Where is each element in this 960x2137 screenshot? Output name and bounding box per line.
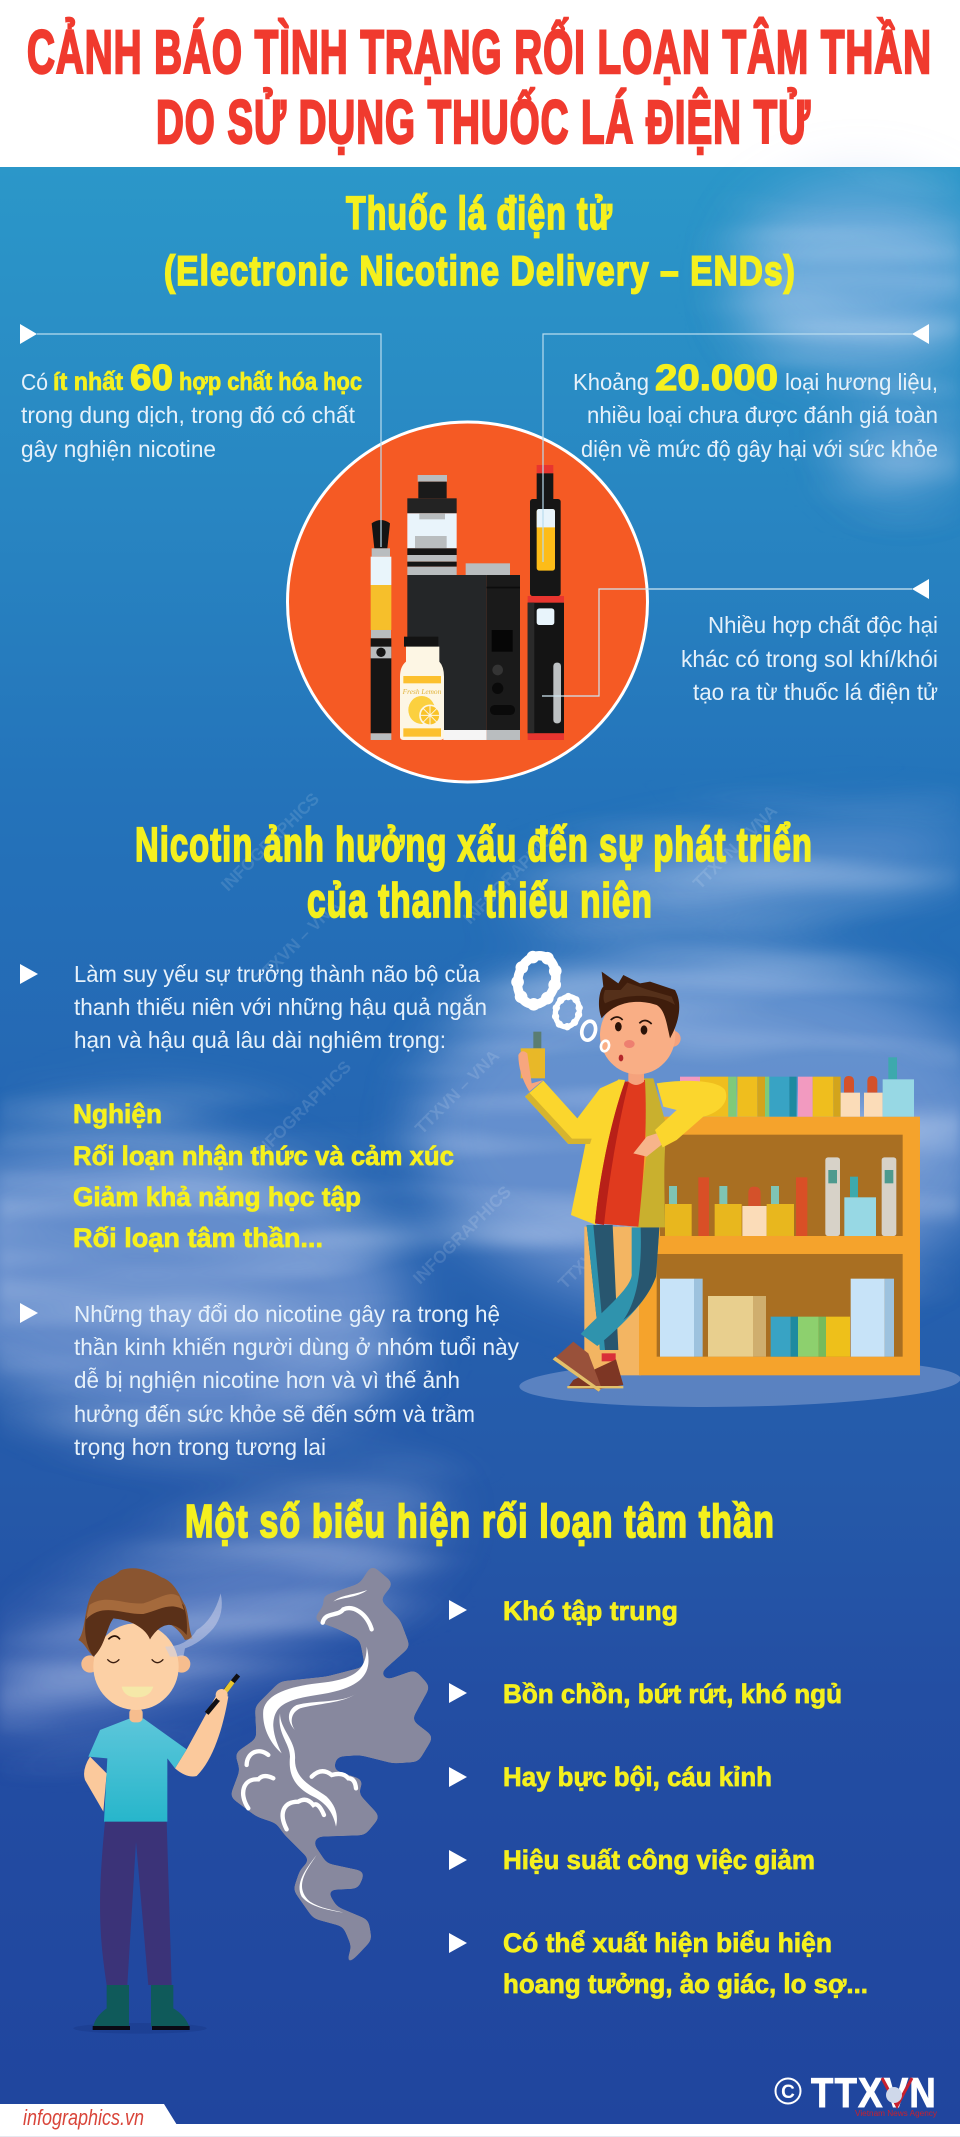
callout: 20,000 flavours: 20.000 (655, 357, 778, 398)
logo: TTXVN: C (781, 2082, 795, 2103)
watermarks: INFOGRAPHICS (217, 789, 323, 895)
ground shadow (519, 1355, 960, 1411)
item: delusions: Có thể xuất hiện biểu hiện (503, 1928, 832, 1958)
callout: 20,000 flavours (543, 324, 938, 562)
shelf (584, 1117, 920, 1375)
arrow: lower right callout marker (912, 579, 929, 599)
watermarks: TTXVN – VNA (251, 896, 343, 988)
callout: 60 chemical compounds: trong dung dịch, trong đó có chất (21, 402, 355, 428)
item: delusions: hoang tưởng, ảo giác, lo sợ... (503, 1969, 868, 1999)
legs (587, 1225, 618, 1350)
logo: TTXVN: Vietnam News Agency (855, 2109, 937, 2118)
callout: toxic compounds in aerosol: tạo ra từ thuốc lá điện tử (693, 679, 938, 705)
text block: brain development: Làm suy yếu sự trưởng thành não bộ của (74, 961, 481, 987)
arrow: left callout marker (20, 324, 37, 344)
icon: slim e-cigarette (371, 520, 391, 740)
text block: nervous system changes: dễ bị nghiện nicotine hơn và vì thế ảnh (74, 1367, 460, 1393)
hair (78, 1568, 193, 1657)
item: lower performance: Hiệu suất công việc giảm (503, 1845, 815, 1875)
callout: toxic compounds in aerosol: khác có trong sol khí/khói (681, 646, 938, 672)
shoes (567, 1359, 623, 1389)
callout: 20,000 flavours: Khoảng (573, 369, 649, 395)
heading: nicotine effects on youth: của thanh thiếu niên (307, 875, 653, 928)
callout: 60 chemical compounds: Có (21, 369, 48, 395)
list: consequences: Nghiện (73, 1099, 162, 1129)
text block: brain development (20, 961, 487, 1053)
footer: white strip with source tab (0, 2104, 960, 2137)
callout: 60 chemical compounds (20, 324, 381, 547)
text block: nervous system changes (20, 1301, 519, 1460)
text block: nervous system changes: Những thay đổi do nicotine gây ra trong hệ (74, 1301, 500, 1327)
callout: 20,000 flavours: diện về mức độ gây hại với sức khỏe (581, 436, 938, 462)
icon: pen vape (528, 465, 564, 740)
item: delusions (449, 1928, 868, 1999)
text block: brain development: hạn và hậu quả lâu dài nghiêm trọng: (74, 1027, 446, 1053)
shelf top products (680, 1057, 914, 1117)
list: consequences: Rối loạn nhận thức và cảm xúc (73, 1141, 454, 1171)
watermarks: INFOGRAPHICS (459, 822, 565, 928)
icon: tank atomizer (407, 475, 457, 575)
icon: lemon e-liquid bottle (400, 602, 444, 740)
arms (525, 1080, 618, 1144)
icon: lemon e-liquid bottle: Fresh Lemon (402, 687, 442, 696)
jacket and shirt (637, 1078, 667, 1227)
head (665, 1031, 681, 1047)
lower shelf products (660, 1279, 894, 1357)
callout: 20,000 flavours: loại hương liệu, (785, 369, 938, 395)
upper shelf products (665, 1157, 896, 1236)
heading: e-cigarette (164, 187, 796, 294)
background: blurred clouds (0, 180, 960, 1771)
item: difficulty concentrating: Khó tập trung (503, 1596, 678, 1626)
callout: 20,000 flavours: nhiều loại chưa được đánh giá toàn (587, 402, 938, 428)
callout: toxic compounds in aerosol: Nhiều hợp chất độc hại (708, 612, 938, 638)
text block: nervous system changes: trọng hơn trong tương lai (74, 1434, 326, 1460)
heading: e-cigarette: Thuốc lá điện tử (346, 187, 613, 239)
item: irritability: Hay bực bội, cáu kỉnh (503, 1762, 772, 1792)
icon: box mod (407, 563, 520, 740)
illustration: young man vaping beside shelf (512, 951, 960, 1411)
watermarks: TTXVN – VNA (689, 801, 781, 893)
list: symptoms (449, 1596, 868, 1999)
watermarks: INFOGRAPHICS (249, 1057, 355, 1163)
text block: nervous system changes: hưởng đến sức khỏe sẽ đến sớm và trầm (74, 1401, 475, 1427)
text block: brain development: thanh thiếu niên với những hậu quả ngắn (74, 994, 487, 1020)
face (107, 1659, 163, 1663)
heading: nicotine effects on youth (135, 819, 813, 928)
vape pen (207, 1675, 238, 1713)
illustration: boy with e-cigarette (73, 1568, 238, 2034)
shirt (88, 1718, 187, 1822)
callout: 60 chemical compounds: ít nhất (53, 368, 124, 396)
heading: symptoms: Một số biểu hiện rối loạn tâm thần (185, 1495, 775, 1547)
icon: bullet (20, 1303, 38, 1323)
callout: 60 chemical compounds: 60 (130, 357, 173, 398)
man figure (512, 951, 726, 1392)
watermarks (217, 789, 781, 1293)
heading: e-cigarette: (Electronic Nicotine Delivery – ENDs) (164, 247, 796, 294)
legs (100, 1822, 172, 1985)
text block: nervous system changes: thần kinh khiến người dùng ở nhóm tuổi này (74, 1334, 519, 1360)
arrow: right callout marker (912, 324, 929, 344)
boots (93, 1985, 129, 2027)
logo: TTXVN: TTXVN (811, 2069, 937, 2116)
watermarks: INFOGRAPHICS (409, 1182, 515, 1288)
icon: bullet (20, 964, 38, 984)
background: cloud streak texture (0, 170, 960, 1728)
hand with device (533, 1032, 541, 1048)
item: restlessness: Bồn chồn, bứt rứt, khó ngủ (503, 1679, 842, 1709)
list: consequences: Rối loạn tâm thần... (73, 1223, 323, 1253)
neck and head (129, 1708, 143, 1722)
illustration: orange circle with vape devices (288, 422, 648, 782)
callout: 60 chemical compounds: hợp chất hóa học (179, 368, 362, 396)
exhaled vapour wisp (165, 1593, 222, 1657)
logo: TTXVN (776, 2069, 937, 2118)
callout: toxic compounds in aerosol (542, 579, 938, 705)
arms (84, 1757, 107, 1812)
smoke rings (512, 951, 610, 1052)
callout: 60 chemical compounds: gây nghiện nicotine (21, 436, 216, 462)
illustration: smoke cloud (230, 1565, 433, 1970)
watermarks: TTXVN – VNA (554, 1201, 646, 1293)
footer: white strip with source tab: infographics.vn (23, 2105, 144, 2130)
list: consequences: Giảm khả năng học tập (73, 1182, 361, 1212)
list: consequences (73, 1099, 454, 1253)
title (27, 18, 932, 156)
watermarks: TTXVN – VNA (411, 1046, 503, 1138)
